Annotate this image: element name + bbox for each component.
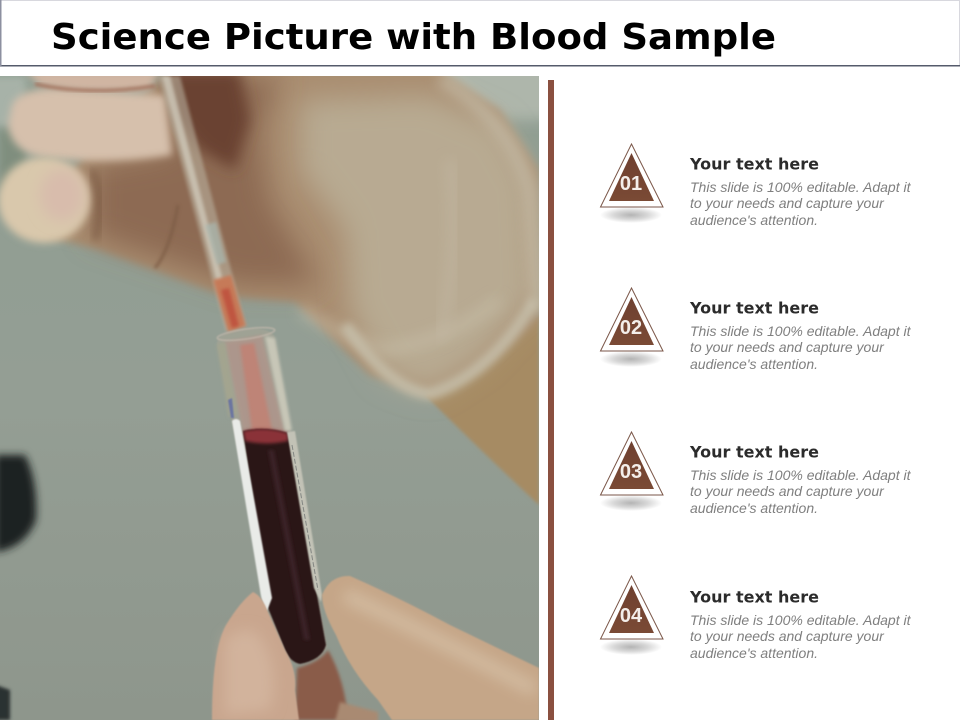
text block 4: audience's attention. bbox=[690, 645, 818, 661]
text block 4: Your text here bbox=[689, 588, 819, 606]
white label bbox=[232, 419, 272, 611]
text block 4: This slide is 100% editable. Adapt it bbox=[690, 612, 912, 628]
lower fingertip bbox=[0, 157, 90, 243]
icon: numbered triangle 01: 01 bbox=[620, 173, 642, 195]
text block 1: Your text here bbox=[689, 154, 819, 174]
text block 4 bbox=[689, 588, 912, 661]
text block 3: Your text here bbox=[689, 442, 819, 462]
text block 1 bbox=[689, 154, 912, 228]
right finger bbox=[322, 576, 539, 720]
text block 3: to your needs and capture your bbox=[690, 483, 885, 499]
test tube bbox=[217, 325, 327, 664]
text block 2: This slide is 100% editable. Adapt it bbox=[690, 323, 912, 339]
vertical divider bar bbox=[548, 80, 554, 720]
text block 3: This slide is 100% editable. Adapt it bbox=[690, 467, 912, 483]
icon: numbered triangle 01 bbox=[600, 144, 663, 223]
glove fabric bbox=[300, 95, 535, 392]
printed label bbox=[287, 431, 322, 602]
pipette bbox=[158, 76, 246, 332]
dark shaded palm bbox=[90, 76, 320, 285]
item 4 bbox=[600, 576, 912, 661]
item 1 bbox=[600, 144, 912, 228]
item 3 bbox=[600, 432, 912, 516]
item 2 bbox=[600, 288, 912, 372]
text block 3: audience's attention. bbox=[690, 500, 818, 516]
text block 2: to your needs and capture your bbox=[690, 339, 885, 355]
upper finger bbox=[8, 88, 172, 161]
text block 3 bbox=[689, 442, 912, 516]
text block 1: to your needs and capture your bbox=[690, 195, 885, 211]
title bar bbox=[0, 0, 960, 66]
title: Science Picture with Blood Sample bbox=[51, 17, 776, 58]
dark object at left edge bbox=[0, 455, 36, 552]
text block 2: audience's attention. bbox=[690, 356, 818, 372]
icon: numbered triangle 02 bbox=[600, 288, 663, 367]
left thumb bbox=[212, 592, 299, 720]
text block 2 bbox=[689, 298, 912, 372]
text block 2: Your text here bbox=[689, 298, 819, 318]
forearm skin behind glove bbox=[425, 315, 539, 505]
text block 4: to your needs and capture your bbox=[690, 628, 885, 644]
icon: numbered triangle 03 bbox=[600, 432, 663, 511]
text block 1: audience's attention. bbox=[690, 212, 818, 228]
icon: numbered triangle 04: 04 bbox=[620, 605, 643, 627]
icon: numbered triangle 02: 02 bbox=[620, 317, 642, 339]
photo: blood sample tube held in gloved hands bbox=[0, 60, 560, 720]
icon: numbered triangle 04 bbox=[600, 576, 663, 655]
text block 1: This slide is 100% editable. Adapt it bbox=[690, 179, 912, 195]
icon: numbered triangle 03: 03 bbox=[620, 461, 642, 483]
blood bbox=[243, 429, 326, 664]
hand body bbox=[60, 76, 539, 388]
dark finger behind tube bbox=[295, 650, 348, 720]
